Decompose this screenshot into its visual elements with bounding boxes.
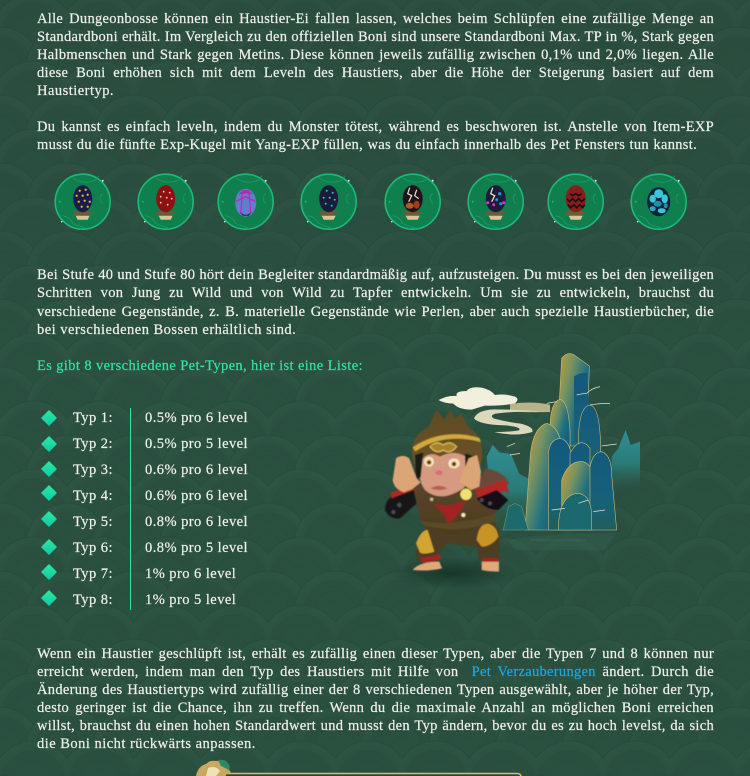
text block: levelling: musst du die fünfte Exp-Kugel mit Yang-EXP füllen, was du einfach innerhalb des Pet Fensters tun kannst. — [37, 137, 697, 153]
text block: introduction — [37, 11, 714, 99]
egg 1: yellow dots — [55, 174, 110, 229]
hands — [393, 456, 421, 492]
text block: evolution: bei verschiedenen Bossen erhältlich sind. — [37, 322, 296, 338]
bottom frame with flower — [196, 760, 522, 776]
text block: introduction: diese Boni erhöhen sich mit dem Leveln des Haustiers, aber die Höhe der Steigerung basiert auf dem — [37, 65, 714, 81]
list: pet types: 1% pro 6 level — [145, 566, 236, 582]
row: type 4 — [41, 485, 57, 501]
cloud — [438, 387, 551, 434]
torso — [413, 475, 503, 533]
row: type 1 — [41, 410, 57, 426]
list: pet types: Typ 6: — [73, 540, 113, 556]
illustration: monkey and mountains — [384, 353, 640, 584]
list: pet types: 0.8% pro 5 level — [145, 540, 248, 556]
list: pet types: Typ 7: — [73, 566, 113, 582]
text block: type change — [36, 646, 714, 752]
row: type 6 — [41, 539, 57, 555]
egg icons row — [54, 173, 687, 230]
text block: introduction: Standardboni erhält. Im Vergleich zu den offiziellen Boni sind unsere Standardboni Max. TP in %, Stark gegen — [37, 29, 714, 45]
glow — [460, 489, 472, 500]
list: pet types: Typ 5: — [73, 514, 113, 530]
text block: type change: desto geringer ist die Chance, ihn zu treffen. Wenn du die maximale Anzahl an möglichen Boni erreichen — [37, 700, 714, 716]
monkey shadow — [390, 557, 517, 589]
text block: levelling: Du kannst es einfach leveln, indem du Monster tötest, während es beschworen ist. Anstelle von Item-EXP — [37, 119, 714, 135]
egg 3: blue and magenta crystal — [218, 174, 273, 229]
face — [419, 453, 470, 496]
gold frame — [225, 774, 521, 776]
text block: evolution — [36, 267, 714, 338]
heading: pet type list: Es gibt 8 verschiedene Pet-Typen, hier ist eine Liste: — [37, 358, 363, 374]
nose and mouth — [435, 470, 443, 475]
list: pet types: Typ 1: — [73, 410, 113, 426]
flower — [196, 760, 231, 776]
mountains — [487, 354, 640, 530]
text block: evolution: Schritten von Jung zu Wild und von Wild zu Tapfer entwickeln. Um sie zu entwickeln, brauchst du — [37, 285, 714, 301]
arms — [385, 488, 417, 519]
head — [412, 410, 482, 478]
row: type 3 — [41, 461, 57, 477]
egg 7: dark red scales — [548, 174, 603, 229]
mountain base — [502, 530, 617, 540]
list: pet types: Typ 4: — [73, 488, 113, 504]
birds — [507, 387, 617, 512]
list: pet types: Typ 3: — [73, 462, 113, 478]
text block: type change: Wenn ein Haustier geschlüpft ist, erhält es zufällig einen dieser Typen, aber die Typen 7 und 8 können nur — [37, 646, 714, 662]
row: type 5 — [41, 511, 57, 527]
text block: introduction: Alle Dungeonbosse können ein Haustier-Ei fallen lassen, welches beim Schlüpfen eine zufällige Menge an — [37, 11, 714, 27]
text block: introduction: Haustiertyp. — [37, 83, 114, 99]
list: pet types: Typ 2: — [73, 436, 113, 452]
text block: evolution: verschiedene Gegenstände, z. B. materielle Gegenstände wie Perlen, aber auch spezielle Haustierbücher, die — [37, 304, 714, 320]
list: pet types: 0.6% pro 6 level — [145, 488, 248, 504]
list: pet types — [41, 408, 248, 610]
text block: levelling — [37, 119, 714, 153]
row: type 7 — [41, 564, 57, 580]
egg 6: black blue magenta — [468, 174, 523, 229]
text block: type change: Änderung des Haustiertyps wird zufällig einer der 8 verschiedenen Typen ausgewählt, aber je höher der Typ, — [37, 682, 714, 698]
list: pet types: Typ 8: — [73, 592, 113, 608]
text block: type change: willst, brauchst du einen hohen Standardwert und musst den Typ ändern, bevor du es zu hoch levelst, da sich — [37, 718, 714, 734]
egg 5: black orange cracked — [385, 174, 440, 229]
list: pet types: 0.6% pro 6 level — [145, 462, 248, 478]
egg 4: navy with cyan dots — [301, 174, 356, 229]
text block: evolution: Bei Stufe 40 und Stufe 80 hört dein Begleiter standardmäßig auf, aufzusteigen. Du musst es bei den jeweiligen — [37, 267, 714, 283]
text block: type change: erreicht werden, indem man den Typ des Haustiers mit Hilfe von Pet Verzauberungen ändert. Durch die — [37, 664, 714, 680]
egg 8: turquoise stones — [631, 174, 686, 229]
list: pet types: 1% pro 5 level — [145, 592, 236, 608]
divider line — [130, 408, 131, 610]
row: type 8 — [41, 590, 57, 606]
list: pet types: 0.8% pro 6 level — [145, 514, 248, 530]
list: pet types: 0.5% pro 5 level — [145, 436, 248, 452]
headband — [413, 434, 481, 451]
text block: type change: die Boni nicht rückwärts anpassen. — [37, 736, 256, 752]
knee guards — [416, 530, 434, 554]
list: pet types: 0.5% pro 6 level — [145, 410, 248, 426]
text block: introduction: Halbmenschen und Stark gegen Metins. Diese können jeweils zufällig zwischen 0,1% und 2,0% liegen. Alle — [37, 47, 714, 63]
monkey — [385, 410, 509, 572]
legs — [416, 517, 500, 563]
row: type 2 — [41, 436, 57, 452]
egg 2: red with white dots — [138, 174, 193, 229]
eyes — [424, 457, 434, 467]
